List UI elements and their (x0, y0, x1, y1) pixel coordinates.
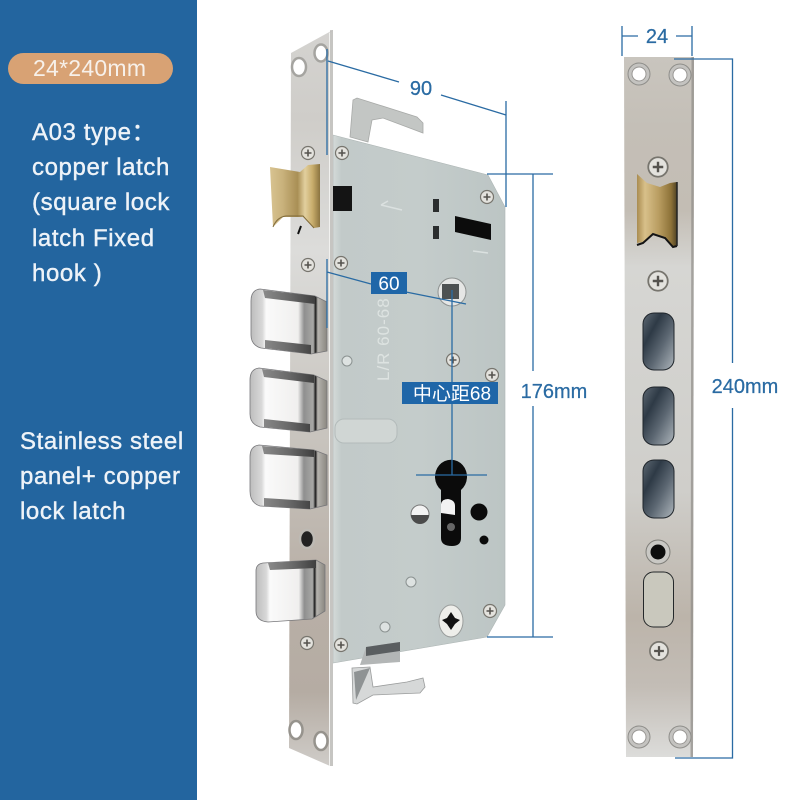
text block: material description: lock latch (20, 498, 126, 525)
spindle hole (438, 278, 466, 306)
case details (333, 146, 498, 652)
size pill: 24*240mm (33, 55, 146, 81)
front view plate (624, 57, 694, 757)
dimension: 176mm: 176mm (521, 381, 587, 403)
top hook (350, 98, 423, 142)
body holes (411, 504, 488, 544)
text block: type description (32, 119, 170, 287)
lower hole (646, 540, 670, 564)
dimension: 24: 24 (646, 26, 668, 48)
text block: type description: (square lock (32, 189, 170, 216)
dimension: 24 (622, 26, 692, 56)
front copper latch (637, 174, 677, 247)
dimension: 90 (327, 49, 506, 207)
face plate (289, 30, 333, 766)
plate face (624, 57, 694, 757)
deadbolt 1 (251, 289, 327, 354)
case marking: L/R 60-68 (374, 297, 393, 381)
dimension: center distance 68: 中心距68 (413, 383, 491, 405)
lock case body (333, 135, 505, 663)
mounting holes (628, 63, 691, 748)
dimension: 240mm: 240mm (712, 376, 778, 398)
panel: blue sidebar (0, 0, 197, 800)
text block: type description: hook ) (32, 260, 102, 287)
slide slot (335, 419, 397, 443)
size pill (8, 53, 173, 84)
dimension: 60: 60 (378, 274, 400, 295)
keyhole (439, 605, 463, 637)
dimension: 90: 90 (410, 78, 432, 100)
dimension: 176mm (487, 174, 587, 637)
text block: material description: panel+ copper (20, 463, 181, 490)
lock side view (250, 30, 505, 766)
text block: material description (20, 428, 184, 525)
dimension: 240mm (674, 59, 778, 758)
text block: type description: copper latch (32, 154, 170, 181)
deadbolt 3 (250, 445, 327, 509)
text block: material description: Stainless steel (20, 428, 184, 455)
bolt slots (643, 313, 674, 518)
cylinder hole (435, 460, 467, 546)
dimension: center distance 68 (402, 290, 498, 475)
silver slot (644, 572, 674, 627)
deadbolt 4 (256, 560, 325, 622)
copper latch (270, 164, 320, 234)
text block: type description: latch Fixed (32, 225, 155, 252)
text block: type description: A03 type： (32, 119, 156, 146)
deadbolt 2 (250, 368, 327, 432)
front screws (648, 157, 668, 660)
dimension: 60 (327, 259, 466, 328)
bottom hook (352, 642, 425, 704)
